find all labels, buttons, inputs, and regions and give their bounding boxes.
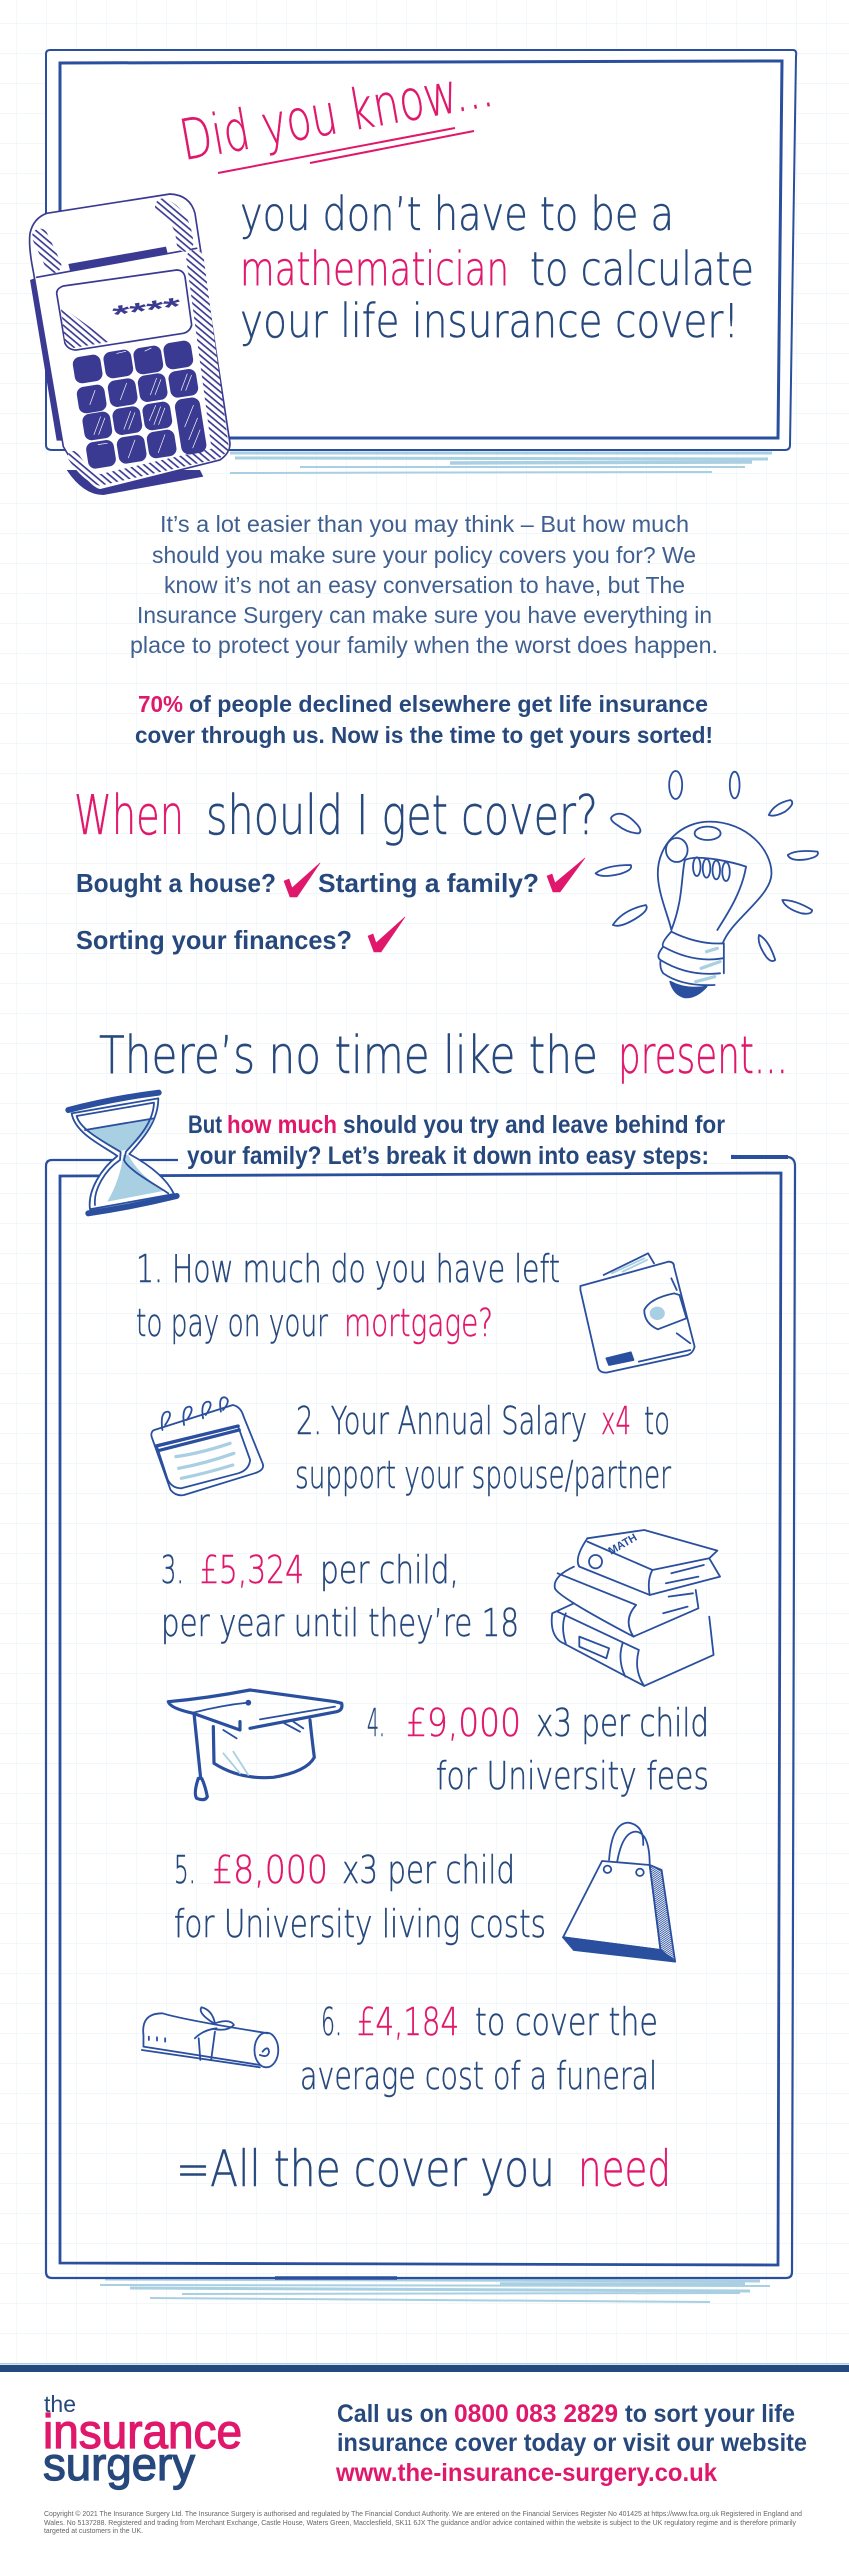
conclusion heading: need [578, 2140, 671, 2198]
step 2: 2. Your Annual Salary [296, 1399, 587, 1443]
step 6 [300, 2000, 658, 2098]
logo [43, 2391, 242, 2490]
call to action: to sort your life [625, 2400, 795, 2428]
step 4: for University fees [436, 1754, 709, 1798]
copyright: Wales. No 5137288. Registered and trading from Merchant Exchange, Castle House, Waters Green, Macclesfield, SK11 6JX The guidance and/or advice contained within the website is subject to the UK regulatory regime and is therefore primarily [44, 2518, 796, 2527]
step 5 [174, 1848, 546, 1946]
statistic callout: of people declined elsewhere get life insurance [189, 691, 708, 717]
footer bar [0, 2363, 849, 2372]
call to action: 0800 083 2829 [454, 2400, 618, 2428]
heading: when should I get cover: When [74, 784, 184, 847]
headline text: you don’t have to be a [240, 187, 674, 241]
step 2: support your spouse/partner [295, 1453, 671, 1497]
step 6: to cover the [475, 2000, 658, 2044]
step 6: £4,184 [357, 2000, 459, 2044]
icon: calculator: **** [111, 293, 183, 329]
logo: insurance [43, 2406, 242, 2459]
headline text: to calculate [530, 242, 754, 296]
checklist: Sorting your finances? [76, 925, 352, 955]
step 5: x3 per child [342, 1848, 515, 1892]
intro to steps [187, 1111, 725, 1170]
headline text: your life insurance cover! [240, 294, 739, 348]
step 4: £9,000 [406, 1701, 521, 1745]
step 5: 5. [174, 1848, 196, 1892]
step 4: x3 per child [536, 1701, 709, 1745]
checklist: Starting a family? [318, 868, 539, 898]
step 5: for University living costs [174, 1902, 546, 1946]
icon: scroll [142, 2007, 278, 2067]
icon: calendar [151, 1397, 263, 1495]
intro paragraph: It’s a lot easier than you may think – But how much [160, 511, 689, 537]
call to action: www.the-insurance-surgery.co.uk [335, 2459, 717, 2487]
step 4 [367, 1701, 709, 1798]
step 1: 1. How much do you have left [136, 1247, 560, 1291]
icon: wallet [580, 1253, 695, 1373]
intro paragraph: should you make sure your policy covers you for? We [152, 542, 696, 568]
step 6: 6. [321, 2000, 342, 2044]
intro paragraph: know it’s not an easy conversation to have, but The [164, 572, 685, 598]
statistic callout: 70% [138, 691, 183, 717]
intro paragraph: place to protect your family when the worst does happen. [130, 632, 718, 658]
step 1 [136, 1247, 560, 1345]
statistic callout: cover through us. Now is the time to get yours sorted! [135, 722, 713, 748]
icon: calculator [30, 194, 230, 495]
panel: steps frame [46, 1156, 795, 2302]
intro to steps: But [188, 1111, 223, 1139]
intro to steps: how much [227, 1111, 337, 1139]
headline text: mathematician [240, 242, 509, 296]
step 2: to [644, 1399, 670, 1443]
checklist [76, 858, 585, 955]
icon: light bulb [596, 771, 818, 997]
step 3: per child, [320, 1548, 459, 1592]
intro paragraph: Insurance Surgery can make sure you have everything in [137, 602, 712, 628]
copyright [44, 2509, 802, 2535]
heading: when should I get cover: should I get cover? [206, 784, 598, 847]
step 2: x4 [601, 1399, 631, 1443]
checklist: Bought a house? [76, 868, 276, 898]
logo: surgery [43, 2438, 195, 2490]
icon: shopping bag [563, 1823, 675, 1962]
logo: the [44, 2391, 76, 2417]
step 3: 3. [161, 1548, 184, 1592]
copyright: targeted at customers in the UK. [44, 2526, 143, 2535]
headline text [240, 187, 754, 348]
call to action [335, 2400, 807, 2487]
step 3 [161, 1548, 519, 1645]
intro to steps: your family? Let’s break it down into easy steps: [187, 1142, 709, 1170]
icon: graduation cap [168, 1690, 342, 1800]
panel: did you know frame [46, 50, 796, 473]
statistic callout [135, 691, 713, 748]
step 1: to pay on your [136, 1301, 328, 1345]
heading: did you know: Did you know... [175, 55, 498, 174]
step 1: mortgage? [344, 1301, 493, 1345]
conclusion heading: =All the cover you [176, 2140, 555, 2198]
step 5: £8,000 [212, 1848, 328, 1892]
intro paragraph [130, 511, 718, 658]
heading: did you know [175, 55, 498, 174]
icon: hourglass [68, 1093, 177, 1213]
icon: stack of books [552, 1530, 720, 1686]
step 4: 4. [367, 1701, 385, 1745]
heading: no time like the present: There’s no time like the [99, 1026, 598, 1086]
heading: when should I get cover [74, 784, 598, 847]
icon: stack of books: MATH [606, 1532, 639, 1558]
step 3: £5,324 [200, 1548, 304, 1592]
call to action: Call us on [337, 2400, 448, 2428]
step 3: per year until they’re 18 [161, 1601, 519, 1645]
step 6: average cost of a funeral [300, 2054, 657, 2098]
intro to steps: should you try and leave behind for [343, 1111, 725, 1139]
call to action: insurance cover today or visit our website [337, 2429, 807, 2457]
step 2 [295, 1399, 671, 1497]
